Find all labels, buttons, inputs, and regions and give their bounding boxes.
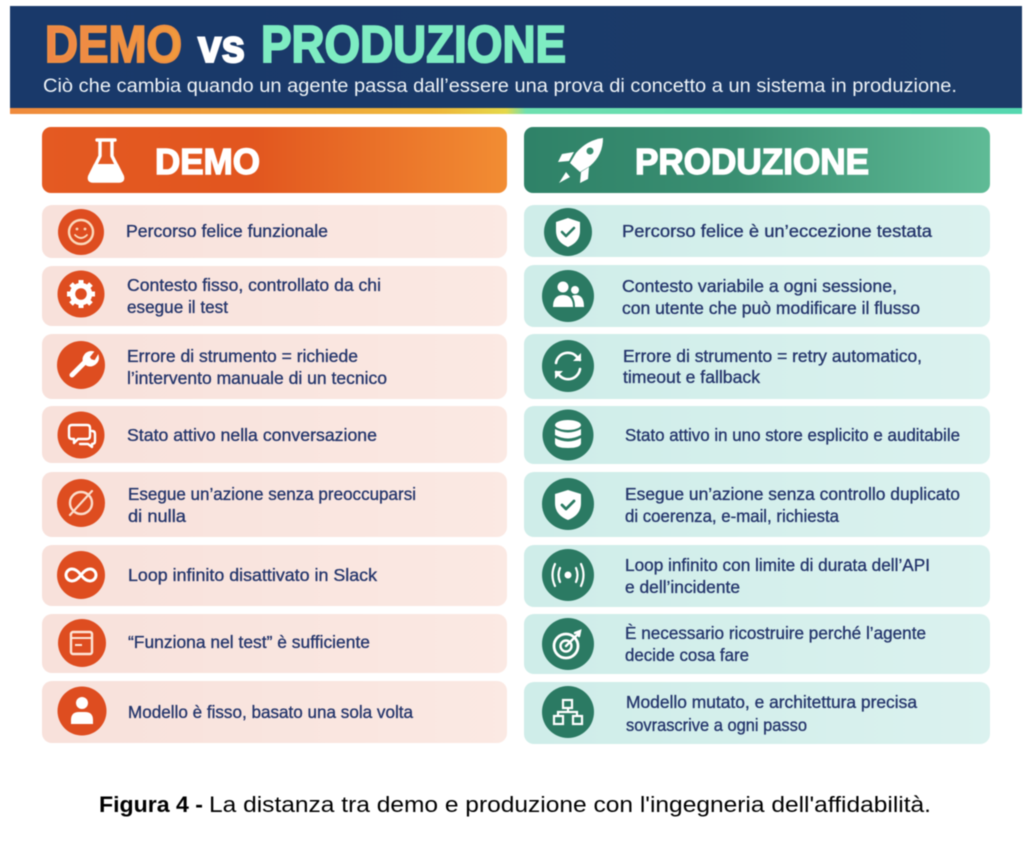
panel: produzione column (524, 127, 990, 744)
icon: signal (542, 549, 594, 601)
text: di coerenza, e-mail, richiesta (625, 506, 839, 526)
text: decide cosa fare (625, 645, 749, 665)
produzione heading label: PRODUZIONE (635, 141, 869, 182)
title: DEMO (45, 16, 182, 74)
row: percorso felice testato (524, 205, 990, 257)
text: timeout e fallback (623, 367, 760, 387)
text: Errore di strumento = richiede (127, 346, 358, 366)
icon: smile (58, 209, 104, 255)
text (626, 692, 917, 735)
title: PRODUZIONE (261, 16, 566, 74)
subtitle: Ciò che cambia quando un agente passa dall’essere una prova di concetto a un sistema in produzione. (43, 75, 957, 97)
text: Esegue un’azione senza controllo duplicato (625, 484, 960, 504)
icon: rocket (558, 138, 603, 183)
text: esegue il test (127, 297, 228, 317)
icon: users (542, 270, 594, 322)
row: modello mutato (524, 682, 990, 744)
text: l’intervento manuale di un tecnico (127, 368, 387, 388)
text (625, 623, 926, 665)
row: stato attivo (42, 406, 507, 463)
text: Stato attivo in uno store esplicito e auditabile (625, 425, 960, 445)
icon: database (542, 410, 594, 460)
text: Modello mutato, e architettura precisa (626, 692, 917, 712)
text (128, 484, 416, 526)
row: contesto fisso (42, 266, 507, 326)
title (45, 16, 566, 74)
row: limite API (524, 545, 990, 607)
text: sovrascrive a ogni passo (626, 715, 807, 735)
row: contesto variabile (524, 265, 990, 327)
text: Percorso felice funzionale (126, 221, 328, 241)
panel: demo column (42, 127, 507, 743)
caption: La distanza tra demo e produzione con l'ingegneria dell'affidabilità. (209, 792, 931, 817)
text: “Funziona nel test” è sufficiente (128, 632, 370, 652)
row: retry automatico (524, 334, 990, 399)
text: con utente che può modificare il flusso (622, 298, 920, 318)
icon: shield check (544, 208, 592, 256)
text: Loop infinito con limite di durata dell’API (625, 555, 930, 575)
row: esegue azione (42, 472, 507, 537)
text: Contesto fisso, controllato da chi (127, 275, 381, 295)
icon: refresh (542, 340, 594, 392)
text (127, 346, 387, 388)
text (623, 346, 922, 387)
icon: target (542, 618, 594, 670)
icon: infinity (57, 551, 105, 599)
icon: crossed circle (57, 479, 105, 527)
icon: window (58, 619, 106, 667)
text (622, 276, 920, 318)
text (625, 484, 960, 526)
icon: chat (58, 412, 104, 458)
text: È necessario ricostruire perché l’agente (625, 623, 926, 643)
text (625, 555, 930, 597)
icon: hierarchy (542, 686, 594, 738)
row: modello fisso (42, 681, 507, 743)
header banner (10, 6, 1022, 114)
text: Percorso felice è un’eccezione testata (622, 221, 932, 241)
text: Stato attivo nella conversazione (127, 425, 377, 445)
text: Errore di strumento = retry automatico, (623, 346, 922, 366)
produzione heading (524, 127, 990, 193)
text: Modello è fisso, basato una sola volta (128, 702, 413, 722)
text: di nulla (128, 506, 186, 526)
row: controllo duplicato (524, 472, 990, 537)
icon: person (58, 686, 106, 736)
text: e dell’incidente (625, 577, 740, 597)
demo heading label: DEMO (155, 141, 260, 182)
icon: flask (88, 140, 124, 181)
row: ricostruire (524, 614, 990, 674)
title: vs (198, 20, 245, 72)
demo heading (42, 127, 507, 193)
row: store esplicito (524, 406, 990, 464)
icon: wrench (57, 341, 105, 389)
row: funziona nel test (42, 614, 507, 673)
text: Esegue un’azione senza preoccuparsi (128, 484, 416, 504)
icon: shield check (542, 478, 594, 530)
icon: gear (58, 270, 104, 318)
row: percorso felice (42, 205, 507, 258)
text (127, 275, 381, 317)
row: loop infinito (42, 545, 507, 606)
row: errore di strumento (42, 334, 507, 399)
caption: Figura 4 - (99, 792, 203, 817)
text: Contesto variabile a ogni sessione, (622, 276, 897, 296)
text: Loop infinito disattivato in Slack (128, 565, 377, 585)
